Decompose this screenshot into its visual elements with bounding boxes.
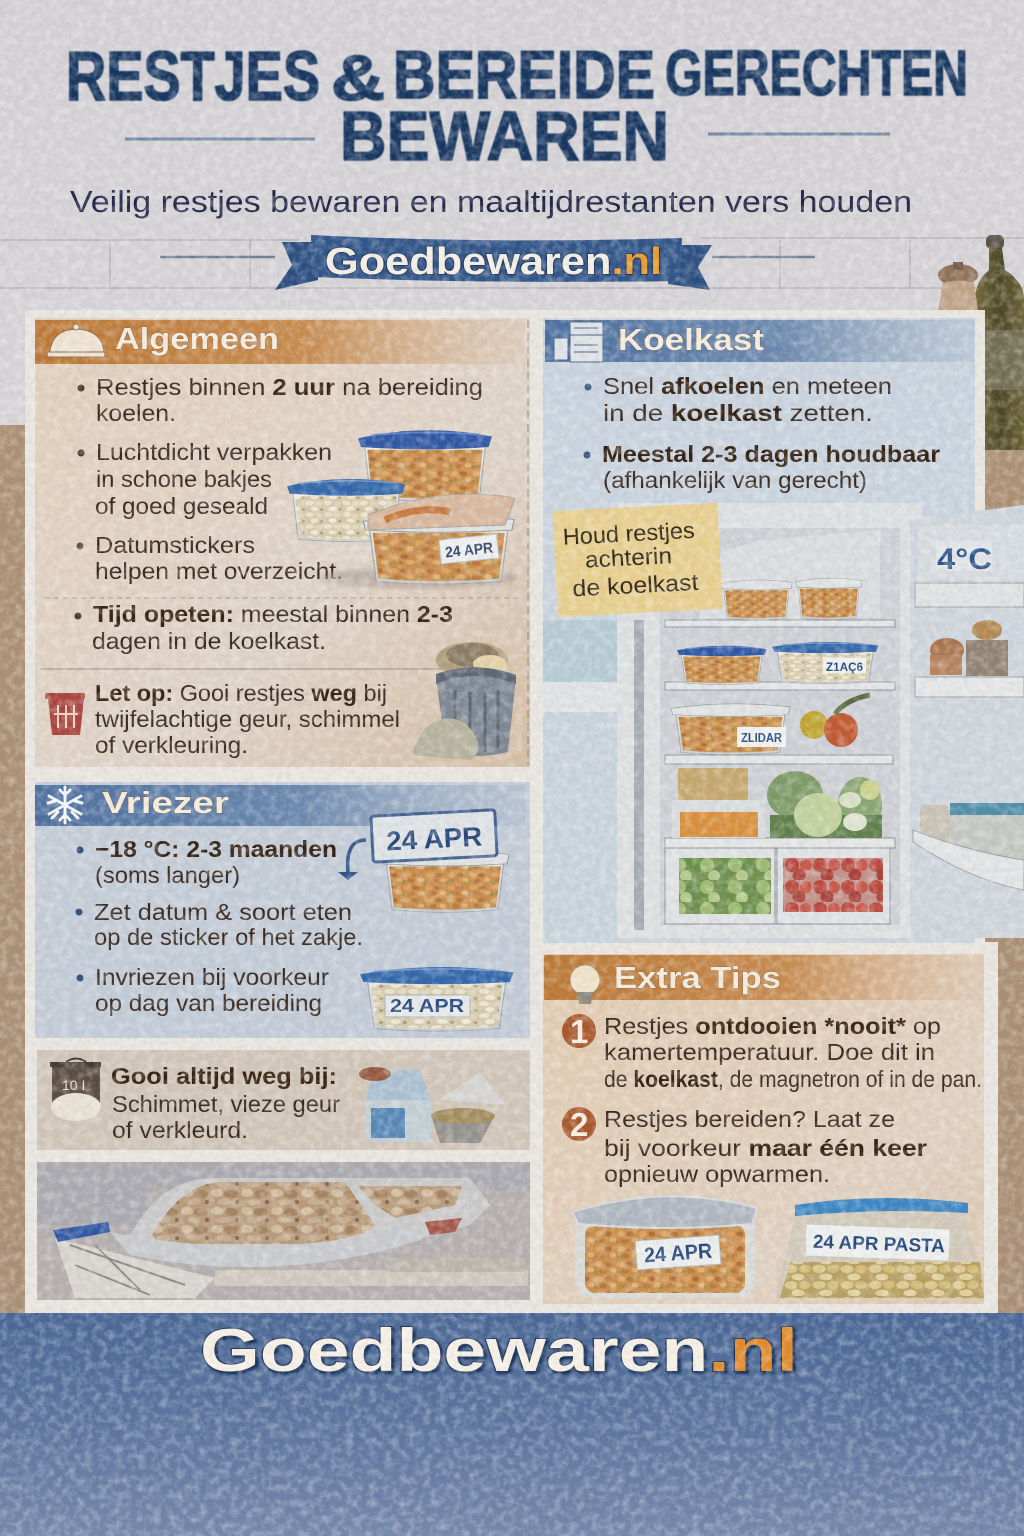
oil bottle: [975, 235, 1024, 450]
temperature label: 4°C: [937, 543, 992, 576]
panel: extra tips: [543, 954, 984, 1304]
title: &: [331, 42, 385, 114]
tip 2: 2: [570, 1106, 588, 1143]
date label: 24 APR: [444, 540, 494, 561]
panel: koelkast: [543, 318, 1024, 943]
freezer container with tag: 24 APR: [385, 821, 483, 856]
title: [66, 37, 968, 175]
algemeen list: in schone bakjes: [96, 466, 272, 492]
bag with pasta label: [775, 1198, 984, 1298]
ribbon text: Goedbewaren .nl: [325, 241, 662, 283]
sticky note: achterin: [584, 542, 673, 573]
vegetables: [767, 771, 882, 838]
icon: light bulb: [570, 965, 600, 1004]
gooi text: [111, 1063, 340, 1143]
vriezer list: [76, 836, 363, 1016]
vriezer list: Invriezen bij voorkeur: [95, 964, 329, 990]
title: RESTJES: [66, 37, 320, 115]
warning text: [95, 680, 400, 758]
subtitle: Veilig restjes bewaren en maaltijdrestanten vers houden: [70, 184, 912, 219]
title: BEREIDE: [393, 37, 655, 113]
icon: serving dome: [47, 324, 105, 357]
panel: vriezer: [35, 782, 530, 1038]
icon: arrow head: [338, 872, 358, 880]
footer band: [0, 1313, 1024, 1536]
koelkast list: Meestal 2-3 dagen houdbaar: [602, 441, 940, 467]
koelkast header: [545, 320, 975, 362]
plastic bag: [55, 1238, 215, 1298]
sticky note: de koelkast: [572, 569, 700, 601]
bag with pasta label: 24 APR PASTA: [813, 1232, 946, 1257]
algemeen list: dagen in de koelkast.: [92, 628, 326, 654]
tile lines: [0, 238, 1024, 288]
container with beans: [360, 967, 513, 1031]
clear container with label: [573, 1196, 757, 1298]
date label: [439, 534, 499, 564]
fridge drawers: [665, 848, 890, 924]
red clip: [425, 1218, 462, 1235]
warning text: of verkleuring.: [95, 732, 248, 758]
icon: fridge: [554, 322, 603, 362]
tip 1: kamertemperatuur. Doe dit in: [604, 1039, 935, 1065]
koelkast heading: Koelkast: [618, 322, 764, 357]
sticky note: Houd restjes: [562, 517, 695, 550]
tip 1: [562, 1013, 982, 1092]
koelkast list: (afhankelijk van gerecht): [603, 467, 867, 493]
icon: moldy bin: [50, 1058, 101, 1121]
title rules: [125, 134, 890, 139]
wooden counter left: [0, 425, 30, 1315]
tip 2: [562, 1106, 927, 1187]
warning text: twijfelachtige geur, schimmel: [95, 706, 400, 732]
container with beans: 24 APR: [390, 996, 464, 1016]
panel: bag photo: [37, 1162, 530, 1300]
arrow hook: [348, 840, 366, 872]
food containers: [287, 430, 520, 588]
shelf: [215, 1270, 528, 1286]
icon: moldy bin: 10 I: [62, 1077, 85, 1093]
footer text: Goedbewaren .nl: [200, 1317, 798, 1384]
algemeen list: helpen met overzeicht.: [95, 558, 343, 584]
trash can: [412, 642, 516, 760]
algemeen heading: Algemeen: [115, 321, 279, 356]
algemeen list: koelen.: [96, 400, 176, 426]
gooi text: of verkleurd.: [112, 1117, 248, 1143]
vriezer list: op dag van bereiding: [95, 990, 322, 1016]
clear container with label: 24 APR: [643, 1240, 713, 1267]
algemeen list: [74, 374, 483, 654]
vriezer header: [35, 785, 525, 826]
freezer container with tag: [371, 810, 509, 912]
koelkast list: in de koelkast zetten.: [603, 400, 873, 426]
extra tips header: [544, 955, 984, 1000]
algemeen list: Datumstickers: [95, 532, 255, 558]
wooden counter right: [985, 450, 1024, 1315]
tip 2: Restjes bereiden? Laat ze: [604, 1106, 895, 1132]
fridge: ZLIDAR: [741, 730, 783, 745]
algemeen header: [35, 320, 525, 364]
algemeen list: Luchtdicht verpakken: [96, 439, 332, 465]
bag wrapper: [130, 1178, 490, 1250]
tip 1: 1: [570, 1013, 588, 1050]
tray: [110, 1225, 440, 1267]
algemeen list: Tijd opeten: meestal binnen 2-3: [93, 601, 453, 627]
vriezer list: (soms langer): [95, 862, 240, 888]
fridge door: [910, 505, 1024, 938]
blue clip: [53, 1222, 110, 1242]
white backing extra tips: [533, 942, 998, 1313]
fridge shelves: [665, 620, 895, 848]
icon: snowflake: [48, 787, 82, 823]
vriezer heading: Vriezer: [102, 785, 229, 820]
wrapped food: [152, 1182, 375, 1244]
extra tips heading: Extra Tips: [614, 960, 781, 995]
vriezer list: −18 °C: 2-3 maanden: [95, 836, 337, 862]
panel: algemeen: [35, 318, 530, 767]
fridge: [543, 503, 1024, 940]
panel: gooi altijd weg: [37, 1050, 530, 1150]
white backing board: [25, 310, 985, 1313]
sticky note: [552, 503, 723, 617]
koelkast list: Snel afkoelen en meteen: [603, 373, 892, 399]
algemeen list: of goed geseald: [95, 493, 268, 519]
koelkast list: [584, 373, 940, 493]
algemeen list: Restjes binnen 2 uur na bereiding: [96, 374, 483, 400]
vriezer list: Zet datum & soort eten: [94, 899, 352, 925]
ribbon banner: [160, 235, 815, 290]
pepper mill: [938, 262, 978, 310]
icon: red bin: [45, 693, 85, 735]
jar and bowl: [359, 1067, 505, 1143]
title: BEWAREN: [340, 97, 669, 175]
vriezer list: op de sticker of het zakje.: [94, 924, 363, 950]
gooi text: Gooi altijd weg bij:: [111, 1063, 337, 1089]
gooi text: Schimmet, vieze geur: [112, 1091, 340, 1117]
fridge: Z1AÇ6: [826, 660, 863, 674]
tip 1: Restjes ontdooien *nooit* op: [604, 1013, 941, 1039]
warning text: Let op: Gooi restjes weg bij: [95, 680, 387, 706]
tip 1: de koelkast, de magnetron of in de pan.: [604, 1066, 982, 1092]
tip 2: bij voorkeur maar één keer: [604, 1135, 927, 1161]
tip 2: opnieuw opwarmen.: [604, 1161, 830, 1187]
